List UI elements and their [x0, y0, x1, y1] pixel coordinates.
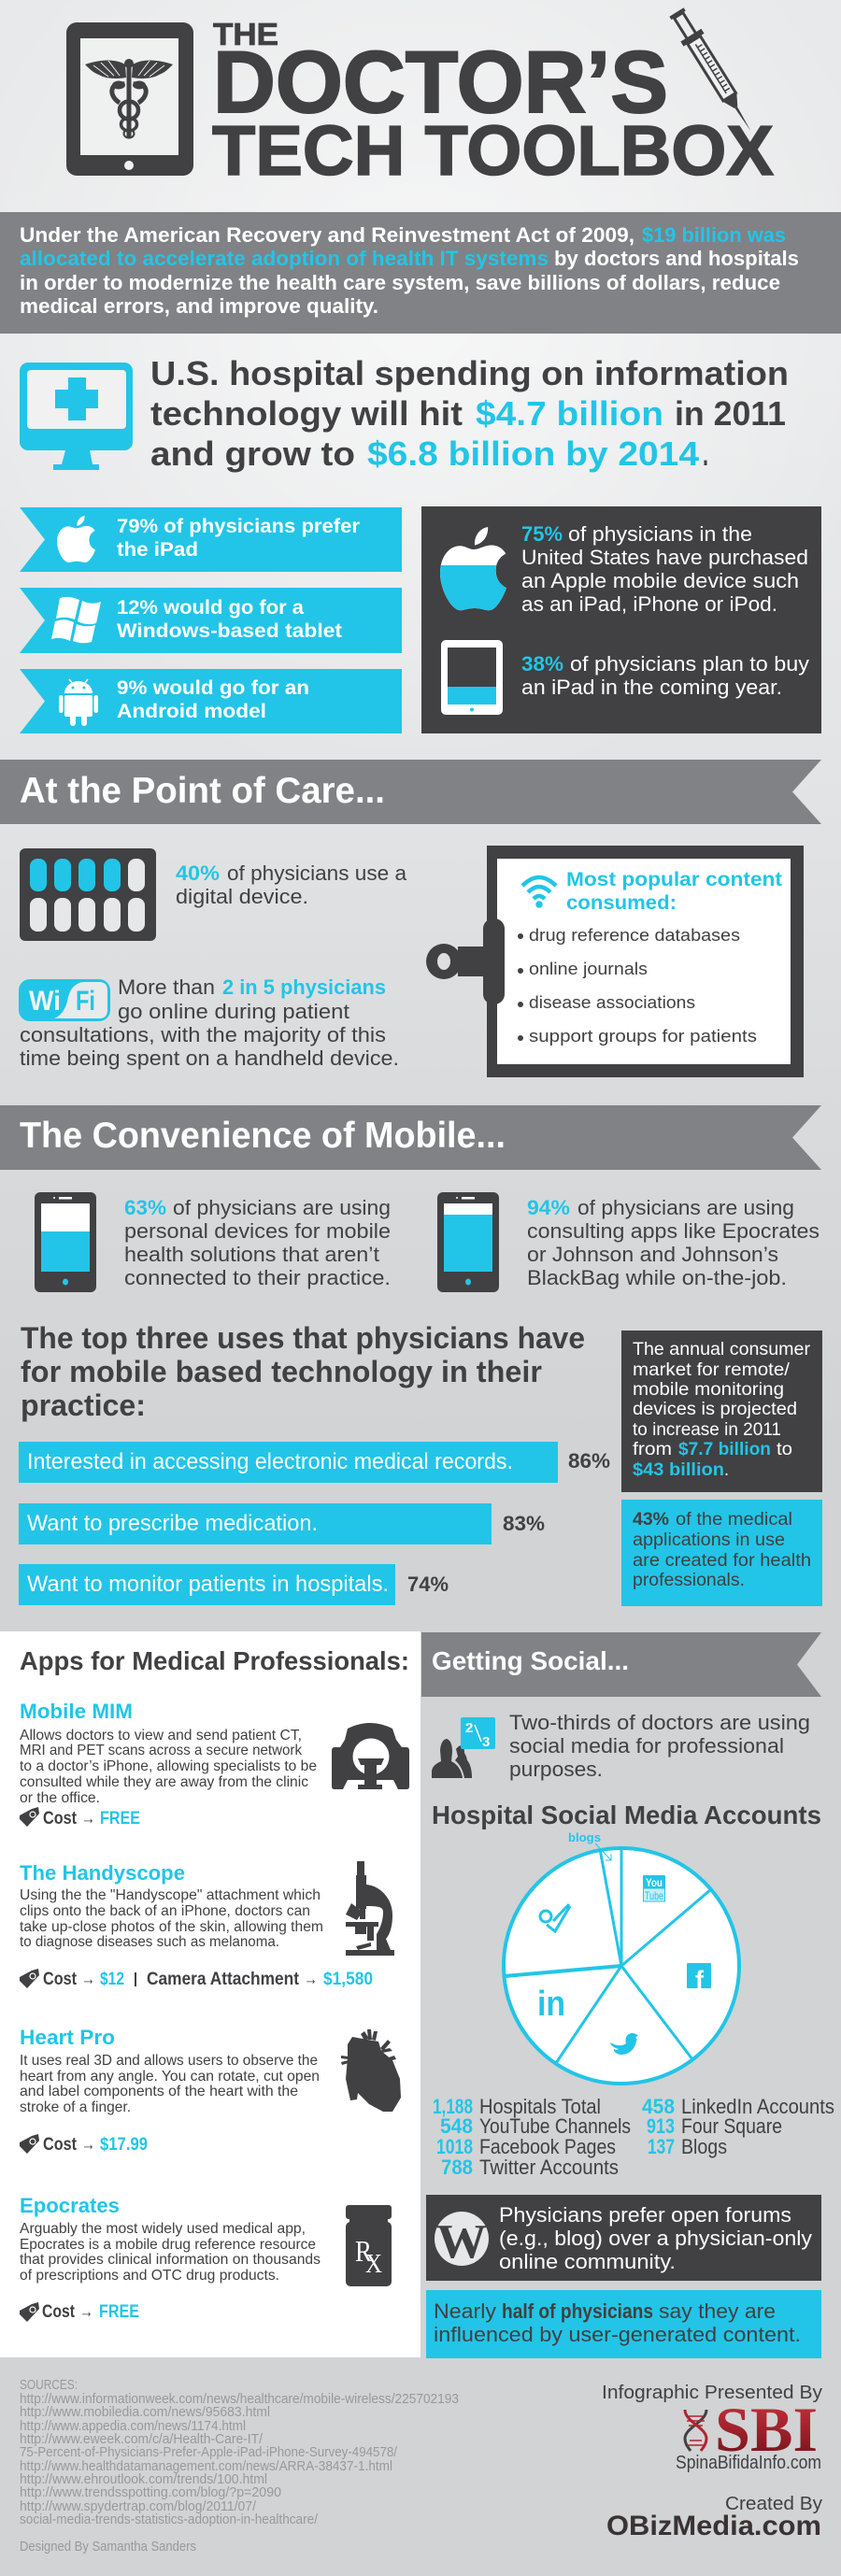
callout: 43 percent of medical applications: applications in use — [633, 1530, 785, 1550]
icon: android — [59, 679, 98, 726]
pie chart: hospital social media accounts — [504, 1830, 739, 2084]
legend: account counts: Blogs — [681, 2135, 727, 2158]
section banner: The Convenience of Mobile: The Convenience of Mobile... — [20, 1116, 506, 1156]
cost: free: → — [79, 2301, 93, 2322]
credit: infographic presented by: Infographic Presented By — [602, 2383, 822, 2403]
app: Mobile MIM: to a doctor’s iPhone, allowing specialists to be — [20, 1758, 317, 1774]
icon: syringe — [666, 6, 762, 137]
text: 63 percent: personal devices for mobile — [124, 1219, 391, 1243]
sources: social-media-trends-statistics-adoption-in-healthcare/ — [20, 2512, 319, 2527]
ribbon: Android model — [20, 669, 402, 733]
icon: prescription bottle — [346, 2205, 392, 2286]
credit: created by: Created By — [725, 2494, 822, 2514]
app: Heart Pro: It uses real 3D and allows users to observe the — [20, 2053, 318, 2069]
logo: SBI: SBI — [715, 2394, 818, 2465]
panel: clipboard content list — [426, 846, 804, 1077]
callout: user-generated content: influenced by user-generated content. — [434, 2323, 801, 2346]
icon: windows — [51, 597, 101, 643]
headline: spending — [150, 354, 789, 473]
cost: handyscope prices: $12 — [100, 1969, 124, 1989]
text: two thirds of doctors: social media for professional — [509, 1734, 784, 1758]
app: Epocrates: Epocrates is a mobile drug reference resource — [20, 2237, 316, 2253]
app: Heart Pro: and label components of the heart with the — [20, 2084, 298, 2099]
text: 94 percent — [527, 1196, 820, 1289]
icon: prescription bottle: X — [365, 2250, 382, 2279]
callout: consumer market: mobile monitoring — [633, 1379, 784, 1400]
cost: handyscope prices: Cost — [43, 1969, 77, 1989]
ribbon: iPad preference: 79% of physicians prefer — [117, 516, 360, 537]
heading: top three uses: The top three uses that physicians have — [21, 1321, 585, 1355]
bar: monitor patients: 74% — [407, 1573, 449, 1596]
icon: clipboard clip — [426, 918, 505, 1004]
legend: account counts: 788 — [441, 2156, 473, 2179]
callout: consumer market: The annual consumer — [633, 1339, 810, 1359]
app: Mobile MIM — [20, 1700, 409, 1829]
callout: consumer market: to increase in 2011 — [633, 1419, 781, 1440]
intro text: allocated to accelerate adoption of health IT systems — [20, 247, 549, 270]
bar: prescribe medication: Want to prescribe medication. — [27, 1511, 318, 1536]
heading: hospital social media accounts: Hospital Social Media Accounts — [432, 1800, 821, 1829]
text: 75 percent — [521, 522, 808, 616]
sources: http://www.ehroutlook.com/trends/100.html — [20, 2472, 267, 2487]
app: Epocrates: Epocrates — [20, 2194, 120, 2217]
icon: Wi-Fi badge: Wi — [29, 986, 61, 1017]
intro text — [20, 223, 799, 318]
ribbon: iPad preference: the iPad — [117, 539, 198, 561]
text: 94 percent: or Johnson and Johnson’s — [527, 1243, 778, 1266]
bar: monitor patients — [19, 1564, 449, 1605]
clipboard list: online journals — [529, 959, 648, 978]
section banner: At the Point of Care — [0, 760, 821, 824]
cost: handyscope prices: → — [304, 1969, 318, 1989]
icon: tablet with caduceus — [66, 22, 193, 176]
text: 2 in 5 physicians: consultations, with the majority of this — [20, 1023, 386, 1046]
cost: handyscope prices — [43, 1969, 373, 1989]
cost: handyscope prices: $1,580 — [323, 1969, 373, 1989]
callout: consumer market: $7.7 billion — [678, 1439, 771, 1459]
text: 2 in 5 physicians — [20, 975, 399, 1070]
title — [212, 17, 774, 190]
icon: price tag — [20, 2134, 39, 2154]
icon: half-filled apple — [440, 527, 506, 610]
legend: account counts: 548 — [440, 2114, 473, 2138]
text: 63 percent: of physicians are using — [173, 1196, 391, 1219]
app: Heart Pro: stroke of a finger. — [20, 2099, 131, 2115]
icon: wifi signal — [522, 877, 556, 906]
intro text: medical errors, and improve quality. — [20, 294, 378, 318]
title: TECH TOOLBOX — [212, 111, 774, 190]
icon: foursquare check — [540, 1904, 570, 1931]
clipboard list: drug reference databases — [529, 925, 740, 945]
cost: 17.99: $17.99 — [100, 2134, 148, 2155]
icon: MRI scanner — [332, 1723, 409, 1789]
callout: open forums: (e.g., blog) over a physician-only — [499, 2227, 813, 2250]
headline: spending: and grow to — [150, 434, 355, 473]
legend: account counts: Twitter Accounts — [479, 2156, 619, 2179]
callout: open forums: online community. — [499, 2250, 676, 2273]
icon: youtube: You — [646, 1876, 663, 1889]
icon: youtube — [643, 1875, 665, 1902]
ribbon: Windows tablet: Windows-based tablet — [117, 620, 342, 642]
icon: prescription bottle: R — [355, 2234, 373, 2268]
bar: prescribe medication: 83% — [503, 1512, 545, 1535]
text: 75 percent: an Apple mobile device such — [521, 569, 799, 592]
ribbon: Windows tablet — [20, 588, 402, 653]
text: 63 percent: 63% — [124, 1196, 166, 1219]
bar: electronic medical records — [19, 1442, 610, 1483]
sources: http://www.trendsspotting.com/blog/?p=2090 — [20, 2485, 281, 2500]
cost: handyscope prices: Camera Attachment — [147, 1969, 299, 1989]
sources — [20, 2378, 459, 2555]
legend: account counts: 1018 — [436, 2135, 473, 2158]
cost: 17.99: → — [81, 2134, 95, 2155]
headline: spending: in 2011 — [675, 394, 786, 433]
cost: free: → — [81, 1808, 95, 1829]
app: The Handyscope: to diagnose diseases such as melanoma. — [20, 1934, 279, 1950]
cost: 17.99: Cost — [43, 2134, 77, 2155]
sources: http://www.spydertrap.com/blog/2011/07/ — [20, 2499, 257, 2514]
label: blogs: blogs — [568, 1830, 601, 1844]
text: 2 in 5 physicians: go online during patient — [118, 1000, 349, 1023]
bar: electronic medical records: Interested in accessing electronic medical records. — [27, 1449, 513, 1474]
app: Mobile MIM: Allows doctors to view and send patient CT, — [20, 1728, 302, 1743]
legend: account counts: Facebook Pages — [479, 2135, 616, 2158]
cost: free: Cost — [43, 1808, 77, 1829]
sources: 75-Percent-of-Physicians-Prefer-Apple-iPad-iPhone-Survey-494578/ — [20, 2445, 398, 2460]
text: 75 percent: as an iPad, iPhone or iPod. — [521, 592, 777, 616]
section banner: At the Point of Care: At the Point of Care... — [20, 771, 385, 811]
ribbon: Windows tablet: 12% would go for a — [117, 597, 304, 619]
callout: consumer market: market for remote/ — [633, 1359, 791, 1380]
icon: wordpress: W — [436, 2215, 487, 2269]
legend: account counts — [433, 2095, 834, 2179]
label: blogs — [568, 1830, 611, 1860]
cost: free: FREE — [100, 1808, 140, 1829]
app: Heart Pro: heart from any angle. You can rotate, cut open — [20, 2069, 320, 2085]
bar: prescribe medication — [19, 1503, 545, 1544]
text: 40 percent: of physicians use a — [227, 861, 407, 885]
app: The Handyscope: clips onto the back of an iPhone, doctors can — [20, 1903, 310, 1919]
app: Epocrates: Arguably the most widely used medical app, — [20, 2221, 306, 2237]
credit: created by: OBizMedia.com — [606, 2511, 821, 2541]
headline: spending: . — [703, 434, 708, 473]
icon: Wi-Fi badge: Fi — [76, 986, 95, 1017]
clipboard heading — [566, 868, 782, 914]
icon: price tag — [20, 1807, 39, 1827]
logo: SBI: SpinaBifidaInfo.com — [676, 2453, 821, 2473]
text: 63 percent — [124, 1196, 391, 1289]
app: Epocrates: that provides clinical information on thousands — [20, 2252, 321, 2268]
legend: account counts: 137 — [648, 2135, 675, 2158]
text: 40 percent — [176, 861, 407, 908]
text: 94 percent: of physicians are using — [577, 1196, 794, 1219]
callout: open forums: Physicians prefer open forums — [499, 2203, 791, 2227]
app: Epocrates — [20, 2194, 392, 2322]
icon: facebook — [687, 1963, 711, 1994]
panel: Apple statistics — [421, 506, 821, 733]
callout: user-generated content: half of physicians — [502, 2299, 653, 2323]
icon: medical monitor — [20, 363, 133, 470]
text: two thirds of doctors: Two-thirds of doctors are using — [509, 1711, 810, 1734]
callout: 43 percent of medical applications: 43% — [633, 1509, 669, 1530]
text: 94 percent: 94% — [527, 1196, 570, 1219]
icon: Wi-Fi badge — [19, 979, 110, 1021]
app: Heart Pro — [20, 2026, 401, 2155]
text: 38 percent: an iPad in the coming year. — [521, 676, 782, 699]
text: 2 in 5 physicians: time being spent on a handheld device. — [20, 1046, 399, 1070]
heading: top three uses: practice: — [21, 1388, 146, 1422]
text: 2 in 5 physicians: 2 in 5 physicians — [222, 975, 386, 999]
legend: account counts: Hospitals Total — [479, 2095, 601, 2118]
cost: free — [42, 2301, 139, 2322]
text: 40 percent: digital device. — [176, 885, 308, 908]
text: 2 in 5 physicians: More than — [118, 975, 215, 999]
callout: consumer market: . — [724, 1459, 729, 1480]
icon: price tag — [20, 2302, 39, 2322]
panel: apps for medical professionals — [0, 1631, 420, 2357]
text: 40 percent: 40% — [176, 861, 220, 885]
title: THE — [213, 17, 278, 51]
app: Heart Pro: Heart Pro — [20, 2026, 115, 2049]
callout: 43 percent of medical applications: of the medical — [676, 1509, 792, 1530]
text: 38 percent — [521, 652, 809, 699]
app: The Handyscope: Using the the "Handyscope" attachment which — [20, 1887, 321, 1903]
icon: apple — [57, 516, 95, 562]
intro text: $19 billion was — [642, 223, 786, 247]
callout: consumer market: devices is projected — [633, 1399, 797, 1419]
icon: two thirds doctors: 2 — [465, 1720, 473, 1736]
callout: consumer market: from — [633, 1439, 672, 1459]
sources: http://www.appedia.com/news/1174.html — [20, 2419, 246, 2434]
section banner: The Convenience of Mobile — [0, 1105, 821, 1170]
icon: DNA helix — [685, 2410, 706, 2451]
text: 38 percent: of physicians plan to buy — [570, 652, 809, 676]
callout: 43 percent of medical applications: are created for health — [633, 1550, 811, 1571]
text: 75 percent: 75% — [521, 522, 563, 546]
text: 63 percent: health solutions that aren’t — [124, 1243, 379, 1266]
icon: microscope — [346, 1861, 394, 1956]
intro text: Under the American Recovery and Reinvestment Act of 2009, — [20, 223, 634, 247]
heading: apps: Apps for Medical Professionals: — [20, 1646, 409, 1675]
callout: 43 percent of medical applications: professionals. — [633, 1570, 745, 1590]
title: DOCTOR’S — [213, 33, 668, 131]
ribbon: iPad preference — [20, 507, 402, 572]
heading: top three uses — [21, 1321, 585, 1422]
clipboard list: disease associations — [529, 992, 695, 1012]
text: 38 percent: 38% — [521, 652, 563, 676]
text: two thirds of doctors: purposes. — [509, 1758, 603, 1781]
text: 75 percent: United States have purchased — [521, 546, 808, 569]
headline: spending: technology will hit — [150, 394, 463, 433]
icon: tablet gauge — [441, 640, 503, 715]
icon: youtube: Tube — [645, 1889, 663, 1902]
bar: electronic medical records: 86% — [568, 1449, 610, 1473]
text: 63 percent: connected to their practice. — [124, 1266, 391, 1289]
app: Epocrates: of prescriptions and OTC drug products. — [20, 2268, 279, 2284]
intro text: in order to modernize the health care system, save billions of dollars, reduce — [20, 271, 780, 294]
intro text: by doctors and hospitals — [554, 247, 799, 270]
sources: SOURCES: — [20, 2378, 78, 2393]
section banner: Getting Social: Getting Social... — [432, 1646, 629, 1675]
credit: created by — [606, 2494, 822, 2541]
headline: spending: $6.8 billion by 2014 — [367, 434, 699, 473]
panel: intro band — [0, 212, 841, 334]
icon: two thirds doctors: 3 — [482, 1734, 490, 1750]
sources: http://www.mobiledia.com/news/95683.html — [20, 2405, 270, 2420]
icon: price tag — [20, 1969, 39, 1988]
sources: http://www.informationweek.com/news/healthcare/mobile-wireless/225702193 — [20, 2392, 459, 2407]
legend: account counts: 458 — [642, 2095, 675, 2118]
clipboard heading: consumed: — [566, 891, 677, 914]
callout: open forums — [426, 2195, 821, 2281]
callout: consumer market — [621, 1331, 822, 1492]
icon: device gauge 40 percent — [20, 848, 156, 941]
sources: Designed By Samantha Sanders — [20, 2540, 196, 2555]
callout: user-generated content: say they are — [659, 2299, 776, 2323]
app: The Handyscope: take up-close photos of the skin, allowing them — [20, 1919, 323, 1935]
clipboard list: support groups for patients — [529, 1026, 757, 1046]
callout: user-generated content — [426, 2290, 821, 2358]
icon: twitter bird — [610, 2033, 638, 2055]
callout: user-generated content: Nearly — [434, 2299, 497, 2323]
text: 94 percent: BlackBag while on-the-job. — [527, 1266, 787, 1289]
icon: two thirds doctors — [432, 1717, 495, 1778]
legend: account counts: 1,188 — [433, 2095, 473, 2118]
app: Mobile MIM: MRI and PET scans across a secure network — [20, 1743, 303, 1758]
bar chart: top three uses — [19, 1442, 610, 1605]
legend: account counts: YouTube Channels — [479, 2114, 631, 2138]
section banner: Getting Social — [421, 1632, 821, 1697]
app: Mobile MIM: or the office. — [20, 1790, 100, 1806]
app: The Handyscope: The Handyscope — [20, 1861, 185, 1885]
callout: consumer market: $43 billion — [633, 1459, 724, 1480]
bar: monitor patients: Want to monitor patients in hospitals. — [27, 1572, 389, 1597]
icon: phone 94 percent — [437, 1192, 499, 1292]
app: The Handyscope — [20, 1861, 394, 1989]
text: 75 percent: of physicians in the — [568, 522, 752, 546]
cost: free: Cost — [42, 2301, 75, 2322]
text: 94 percent: consulting apps like Epocrates — [527, 1219, 820, 1243]
heading: top three uses: for mobile based technology in their — [21, 1355, 542, 1388]
headline: spending: $4.7 billion — [476, 394, 663, 433]
callout: consumer market: to — [777, 1439, 792, 1459]
ribbon: Android model: 9% would go for an — [117, 677, 309, 699]
icon: phone 63 percent — [35, 1192, 96, 1292]
text: two thirds of doctors — [509, 1711, 810, 1781]
clipboard heading: Most popular content — [566, 868, 782, 890]
icon: anatomical heart — [341, 2029, 401, 2112]
ribbon: Android model: Android model — [117, 701, 266, 722]
legend: account counts: Four Square — [681, 2114, 782, 2138]
cost: free — [43, 1808, 140, 1829]
clipboard list — [518, 925, 757, 1046]
legend: account counts: 913 — [647, 2114, 675, 2138]
sources: http://www.eweek.com/c/a/Health-Care-IT/ — [20, 2432, 264, 2447]
headline: spending: U.S. hospital spending on information — [150, 354, 789, 392]
icon: linkedin: in — [537, 1985, 565, 2024]
cost: 17.99 — [43, 2134, 148, 2155]
app: Mobile MIM: Mobile MIM — [20, 1700, 133, 1723]
app: Mobile MIM: consulted while they are away from the clinic — [20, 1774, 308, 1790]
sources: http://www.healthdatamanagement.com/news/ARRA-38437-1.html — [20, 2459, 392, 2474]
callout: 43 percent of medical applications — [621, 1500, 822, 1606]
logo: SBI — [676, 2394, 821, 2473]
cost: free: FREE — [99, 2301, 139, 2322]
cost: handyscope prices: → — [81, 1969, 95, 1989]
icon: facebook: f — [695, 1966, 705, 1994]
